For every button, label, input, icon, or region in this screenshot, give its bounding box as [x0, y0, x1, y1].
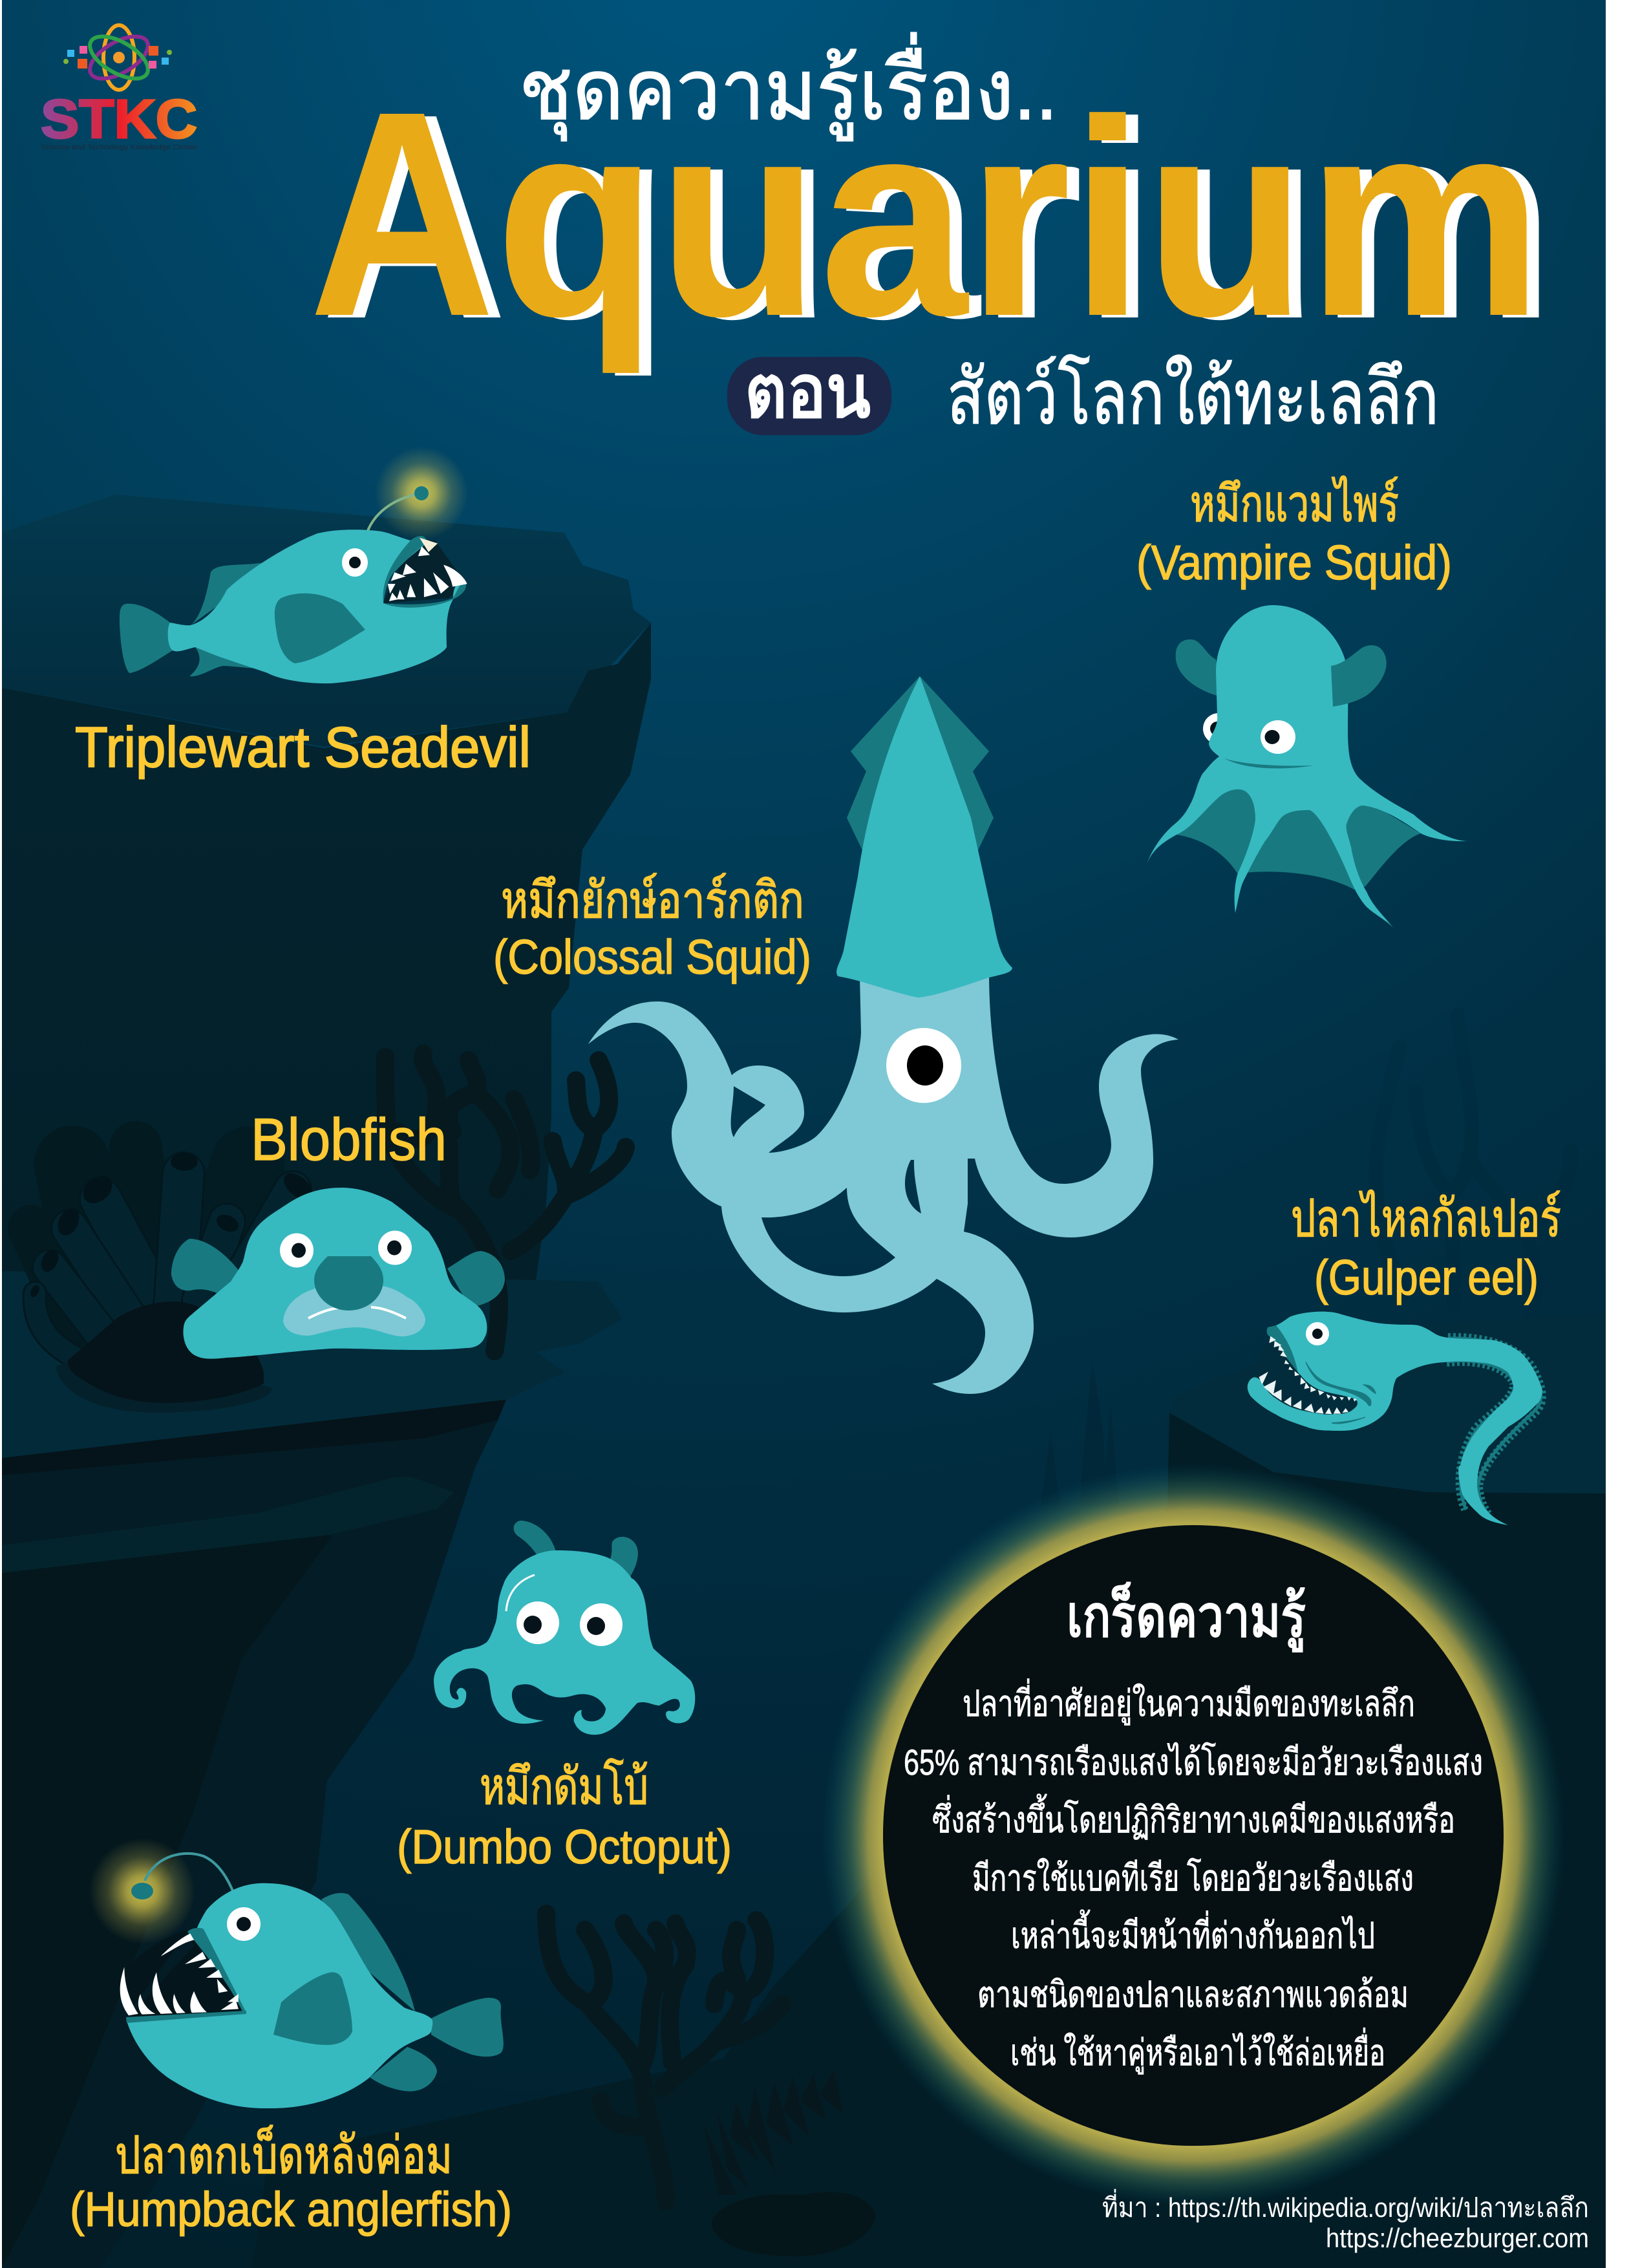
subtitle: สัตว์โลกใต้ทะเลลึก: [947, 355, 1439, 440]
fact body: [904, 1678, 1483, 2075]
left cliff: [2, 495, 651, 2268]
label: Humpback anglerfish: (Humpback anglerfish): [70, 2182, 512, 2236]
label: Vampire Squid: (Vampire Squid): [1136, 535, 1452, 590]
faint seaweed silhouettes: [1041, 1015, 1571, 1506]
label: Humpback anglerfish: [70, 2124, 512, 2236]
fact body: ปลาที่อาศัยอยู่ในความมืดของทะเลลึก: [963, 1678, 1415, 1726]
label: Gulper eel: (Gulper eel): [1314, 1250, 1538, 1305]
sources: https://cheezburger.com: [1326, 2223, 1589, 2253]
Dumbo Octopus: [434, 1521, 695, 1735]
coral bottom: [546, 1914, 782, 2201]
fact body: มีการใช้แบคทีเรีย โดยอวัยวะเรืองแสง: [972, 1857, 1414, 1898]
Triplewart Seadevil: [120, 447, 468, 683]
seabed ground right: [252, 1314, 1606, 2268]
Blobfish: [171, 1188, 505, 1359]
label: Vampire Squid: หมึกแวมไพร์: [1190, 475, 1399, 532]
Gulper eel: [1248, 1312, 1542, 1525]
title: Aquarium: A: [321, 53, 507, 380]
fact circle: [822, 1464, 1565, 2207]
title: Aquarium: quarium: [495, 61, 1543, 376]
sponge corals: [28, 1148, 317, 1364]
label: Gulper eel: [1291, 1190, 1561, 1305]
title: top line: ชุดความรู้เรื่อง..: [519, 32, 1058, 142]
fact heading: เกร็ดความรู้: [1067, 1581, 1306, 1653]
label: Colossal Squid: [493, 872, 811, 984]
rock under blobfish: [56, 1301, 272, 1413]
label: Colossal Squid: หมึกยักษ์อาร์กติก: [501, 872, 804, 928]
title: Aquarium: A: [309, 50, 495, 377]
label: Dumbo Octopus: [397, 1758, 732, 1874]
label: Dumbo Octopus: (Dumbo Octoput): [397, 1820, 732, 1874]
label: Triplewart Seadevil: Triplewart Seadevil: [75, 715, 531, 779]
sponge rock bottom: [703, 2070, 876, 2256]
fact body: ตามชนิดของปลาและสภาพแวดล้อม: [977, 1974, 1409, 2015]
label: Blobfish: Blobfish: [251, 1107, 447, 1173]
Colossal Squid: [588, 676, 1178, 1394]
fact body: เหล่านี้จะมีหน้าที่ต่างกันออกไป: [1011, 1910, 1375, 1956]
label: Dumbo Octopus: หมึกดัมโบ้: [480, 1758, 648, 1815]
fact body: ซึ่งสร้างขึ้นโดยปฏิกิริยาทางเคมีของแสงหรือ: [932, 1794, 1455, 1840]
logo tagline: Science and Technology Knowledge Center: [41, 144, 197, 151]
coral behind blobfish: [385, 1054, 626, 1351]
label: Humpback anglerfish: ปลาตกเบ็ดหลังค่อม: [115, 2124, 452, 2184]
title: Aquarium: quarium: [507, 64, 1555, 379]
logo wordmark: STKC: [41, 89, 197, 149]
pill: episode: ตอน: [745, 350, 871, 433]
label: Vampire Squid: [1136, 475, 1452, 590]
Vampire Squid: [1147, 605, 1467, 930]
sources: [1102, 2189, 1589, 2253]
Humpback anglerfish: [89, 1838, 504, 2108]
fact body: เช่น ใช้หาคู่หรือเอาไว้ใช้ล่อเหยื่อ: [1010, 2027, 1385, 2075]
logo icon: [63, 25, 172, 90]
label: Colossal Squid: (Colossal Squid): [493, 930, 811, 984]
